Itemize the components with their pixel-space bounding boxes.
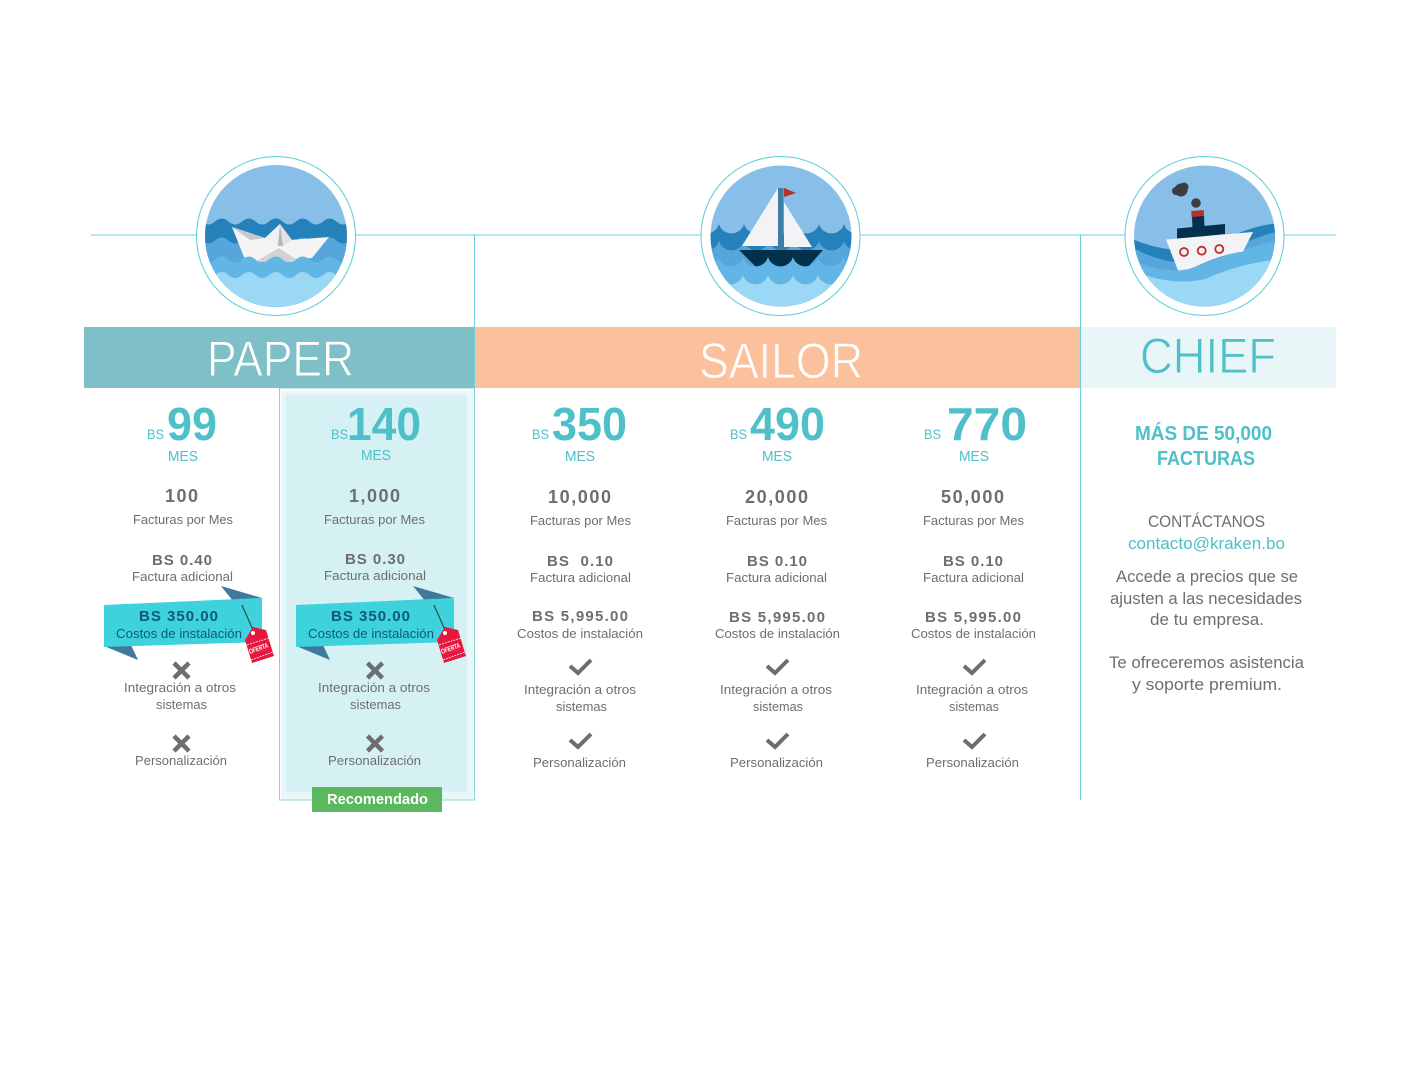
plan column: PAPER 140: [318, 398, 431, 768]
plan column: SAILOR 350: BS: [532, 427, 549, 442]
plan column: PAPER 140: MES: [361, 448, 391, 464]
plan column: CHIEF text: contacto@kraken.bo: [1128, 535, 1285, 553]
plan column: CHIEF text: ajusten a las necesidades: [1110, 590, 1302, 608]
heading: CHIEF: [1081, 327, 1336, 388]
plan column: SAILOR 490: Integración a otros: [720, 682, 833, 697]
icon: check customization 350: [570, 734, 591, 747]
offer ribbon: recommended plan: OFERTA: [440, 642, 461, 656]
heading: PAPER: [84, 327, 474, 388]
icon: check integration 770: [964, 660, 985, 673]
icon: cross customization recommended: [368, 736, 382, 751]
icon: check customization 490: [767, 734, 788, 747]
plan column: SAILOR 770: Personalización: [926, 755, 1019, 770]
plan column: SAILOR 350: sistemas: [556, 699, 607, 714]
plan column: PAPER 99: Integración a otros: [124, 680, 237, 695]
plan column: SAILOR 350: BS 0.10: [547, 553, 613, 570]
plan column: CHIEF text: Te ofreceremos asistencia: [1109, 654, 1305, 672]
plan column: SAILOR 770: Facturas por Mes: [923, 513, 1024, 528]
plan column: PAPER 140: 1,000: [349, 486, 400, 506]
plan column: SAILOR 770: 50,000: [941, 487, 1004, 507]
icon: check customization 770: [964, 734, 985, 747]
offer ribbon: PAPER: Costos de instalación: [116, 626, 242, 641]
plan column: SAILOR 490: MES: [762, 449, 792, 465]
plan column: PAPER 99: sistemas: [156, 697, 207, 712]
plan column: PAPER 99: [124, 398, 237, 768]
plan column: SAILOR 350: Factura adicional: [530, 570, 631, 585]
plan column: SAILOR 770: BS 0.10: [943, 553, 1003, 570]
plan column: CHIEF text: de tu empresa.: [1150, 611, 1264, 629]
plan column: SAILOR 490: 490: [750, 398, 825, 450]
plan column: PAPER 140: BS: [331, 427, 348, 442]
plan column: SAILOR 350: Integración a otros: [524, 682, 637, 697]
plan column: PAPER 140: Factura adicional: [324, 568, 426, 583]
plan column: CHIEF text: y soporte premium.: [1132, 676, 1282, 694]
plan column: PAPER 99: 99: [167, 398, 217, 450]
plan column: SAILOR 490: Personalización: [730, 755, 823, 770]
plan column: SAILOR 490: BS 5,995.00: [729, 609, 825, 626]
plan column: SAILOR 490: [715, 398, 840, 770]
plan column: SAILOR 490: Factura adicional: [726, 570, 827, 585]
icon: check integration 350: [570, 660, 591, 673]
plan column: SAILOR 490: BS: [730, 427, 747, 442]
plan column: PAPER 140: BS 0.30: [345, 551, 405, 568]
plan column: CHIEF text: [1109, 422, 1305, 694]
plan column: PAPER 99: MES: [168, 449, 198, 465]
plan column: SAILOR 350: Facturas por Mes: [530, 513, 631, 528]
heading: CHIEF: CHIEF: [1140, 328, 1276, 384]
plan column: SAILOR 770: MES: [959, 449, 989, 465]
plan column: CHIEF text: Accede a precios que se: [1116, 568, 1298, 586]
plan column: SAILOR 490: Facturas por Mes: [726, 513, 827, 528]
plan column: SAILOR 350: [517, 398, 643, 770]
plan column: SAILOR 490: sistemas: [753, 699, 803, 714]
icon: cross integration: [174, 663, 189, 678]
heading: SAILOR: SAILOR: [699, 333, 863, 389]
plan column: PAPER 99: Facturas por Mes: [133, 512, 233, 527]
icon: cross integration recommended: [368, 663, 382, 678]
badge: Recomendado: [312, 787, 442, 812]
plan column: SAILOR 490: Costos de instalación: [715, 626, 840, 641]
offer ribbon: PAPER: OFERTA: [248, 642, 269, 656]
badge: Recomendado: Recomendado: [327, 791, 428, 808]
heading: PAPER: PAPER: [207, 331, 354, 387]
plan column: SAILOR 770: Factura adicional: [923, 570, 1024, 585]
offer ribbon: PAPER: [104, 586, 274, 663]
icon: cross customization: [174, 736, 189, 751]
offer ribbon: recommended plan: [296, 586, 466, 663]
offer ribbon: recommended plan: Costos de instalación: [308, 626, 434, 641]
plan column: PAPER 140: sistemas: [350, 697, 401, 712]
plan column: PAPER 140: 140: [347, 398, 421, 450]
plan column: PAPER 140: Integración a otros: [318, 680, 431, 695]
icon: steamship: [1125, 156, 1284, 316]
plan column: SAILOR 490: 20,000: [745, 487, 808, 507]
plan column: SAILOR 770: Integración a otros: [916, 682, 1029, 697]
offer ribbon: PAPER: BS 350.00: [139, 608, 218, 625]
plan column: SAILOR 770: BS: [924, 427, 941, 442]
plan column: CHIEF text: CONTÁCTANOS: [1148, 512, 1265, 531]
plan column: SAILOR 350: BS 5,995.00: [532, 608, 628, 625]
plan column: PAPER 99: BS 0.40: [152, 552, 212, 569]
icon: sailboat: [700, 156, 860, 316]
plan column: SAILOR 350: MES: [565, 449, 595, 465]
plan column: PAPER 99: BS: [147, 427, 164, 442]
offer ribbon: recommended plan: BS 350.00: [331, 608, 410, 625]
plan column: PAPER 99: Factura adicional: [132, 569, 233, 584]
plan column: SAILOR 350: Costos de instalación: [517, 626, 643, 641]
plan column: PAPER 140: Facturas por Mes: [324, 512, 425, 527]
plan column: PAPER 99: Personalización: [135, 753, 227, 768]
plan column: SAILOR 350: Personalización: [533, 755, 626, 770]
plan column: SAILOR 770: BS 5,995.00: [925, 609, 1021, 626]
plan column: CHIEF text: FACTURAS: [1157, 448, 1255, 470]
plan column: SAILOR 770: [911, 398, 1036, 770]
icon: check integration 490: [767, 660, 788, 673]
plan column: SAILOR 770: 770: [947, 398, 1027, 450]
plan column: CHIEF text: MÁS DE 50,000: [1135, 422, 1272, 445]
plan column: SAILOR 350: 10,000: [548, 487, 611, 507]
plan column: PAPER 140: Personalización: [328, 753, 421, 768]
plan column: SAILOR 350: 350: [552, 398, 627, 450]
plan column: SAILOR 770: sistemas: [949, 699, 999, 714]
plan column: PAPER 99: 100: [165, 486, 198, 506]
highlighted column frame: [280, 388, 474, 800]
plan column: SAILOR 490: BS 0.10: [747, 553, 807, 570]
icon: paper boat: [196, 156, 356, 316]
plan column: SAILOR 770: Costos de instalación: [911, 626, 1036, 641]
heading: SAILOR: [475, 327, 1080, 389]
